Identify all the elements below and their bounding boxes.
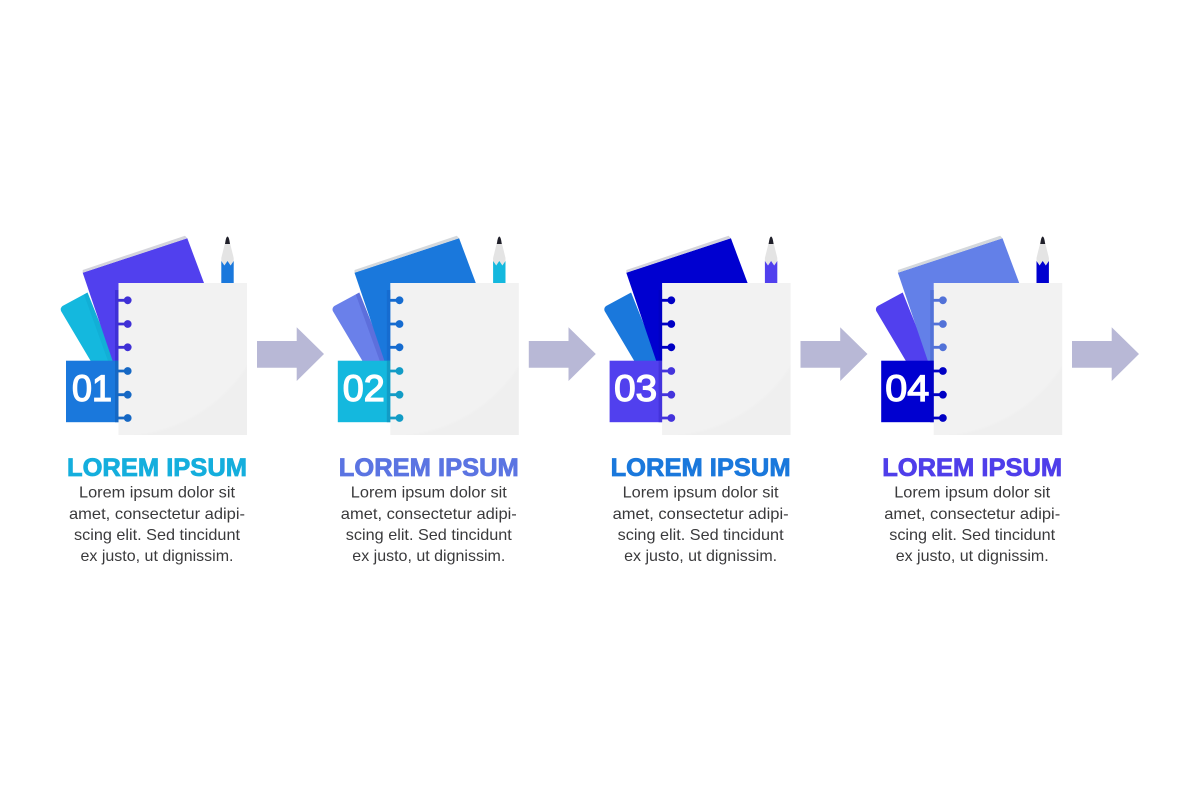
book behind xyxy=(83,238,204,362)
paper sheet xyxy=(118,283,247,435)
number square xyxy=(881,361,934,422)
body text: ex justo, ut dignissim. xyxy=(624,548,777,565)
icon: notebook stack 02 xyxy=(333,236,519,435)
body text: Lorem ipsum dolor sit xyxy=(894,484,1051,502)
body text: amet, consectetur adipi- xyxy=(341,506,517,523)
binding rings xyxy=(659,290,675,422)
heading: LOREM IPSUM xyxy=(882,454,1062,482)
pencil xyxy=(765,236,777,283)
number square xyxy=(338,361,391,422)
body text xyxy=(341,484,517,565)
number square xyxy=(66,361,119,422)
step 2 xyxy=(333,236,519,565)
body text xyxy=(69,484,245,565)
arrow 4 xyxy=(1072,327,1139,381)
icon: notebook stack 03 xyxy=(604,236,791,435)
body text: ex justo, ut dignissim. xyxy=(896,548,1049,565)
number: 02 xyxy=(343,368,385,409)
book behind xyxy=(898,238,1019,362)
number: 01 xyxy=(72,368,112,409)
book behind xyxy=(626,238,748,362)
binding rings xyxy=(930,290,947,422)
paper sheet xyxy=(934,283,1062,435)
number: 03 xyxy=(614,368,657,409)
card behind xyxy=(333,292,387,361)
card behind xyxy=(604,292,659,361)
heading: LOREM IPSUM xyxy=(611,454,791,482)
body text: scing elit. Sed tincidunt xyxy=(618,527,784,544)
icon: notebook stack 01 xyxy=(61,236,247,435)
body text: amet, consectetur adipi- xyxy=(613,506,789,523)
arrow 1 xyxy=(257,327,324,381)
card behind xyxy=(876,292,930,361)
paper sheet xyxy=(390,283,519,435)
body text: ex justo, ut dignissim. xyxy=(352,548,505,565)
body text: Lorem ipsum dolor sit xyxy=(79,484,236,502)
binding rings xyxy=(387,290,403,422)
body text xyxy=(884,484,1060,565)
body text xyxy=(613,484,789,565)
heading: LOREM IPSUM xyxy=(339,454,519,482)
arrow 2 xyxy=(529,327,596,381)
step 4 xyxy=(876,236,1062,565)
step 1 xyxy=(61,236,247,565)
number: 04 xyxy=(885,368,929,409)
body text: Lorem ipsum dolor sit xyxy=(351,484,507,502)
book behind xyxy=(354,238,476,362)
body text: scing elit. Sed tincidunt xyxy=(889,527,1056,544)
pencil xyxy=(221,236,234,283)
paper sheet xyxy=(662,283,791,435)
heading: LOREM IPSUM xyxy=(67,454,247,482)
body text: amet, consectetur adipi- xyxy=(884,506,1060,523)
body text: amet, consectetur adipi- xyxy=(69,506,245,523)
body text: ex justo, ut dignissim. xyxy=(80,548,234,565)
pencil xyxy=(493,236,506,283)
body text: scing elit. Sed tincidunt xyxy=(74,527,241,544)
step 3 xyxy=(604,236,791,565)
icon: notebook stack 04 xyxy=(876,236,1062,435)
number square xyxy=(610,361,663,422)
body text: scing elit. Sed tincidunt xyxy=(346,527,512,544)
pencil xyxy=(1036,236,1049,283)
binding rings xyxy=(115,290,132,422)
body text: Lorem ipsum dolor sit xyxy=(623,484,779,502)
card behind xyxy=(61,292,115,361)
arrow 3 xyxy=(800,327,868,381)
